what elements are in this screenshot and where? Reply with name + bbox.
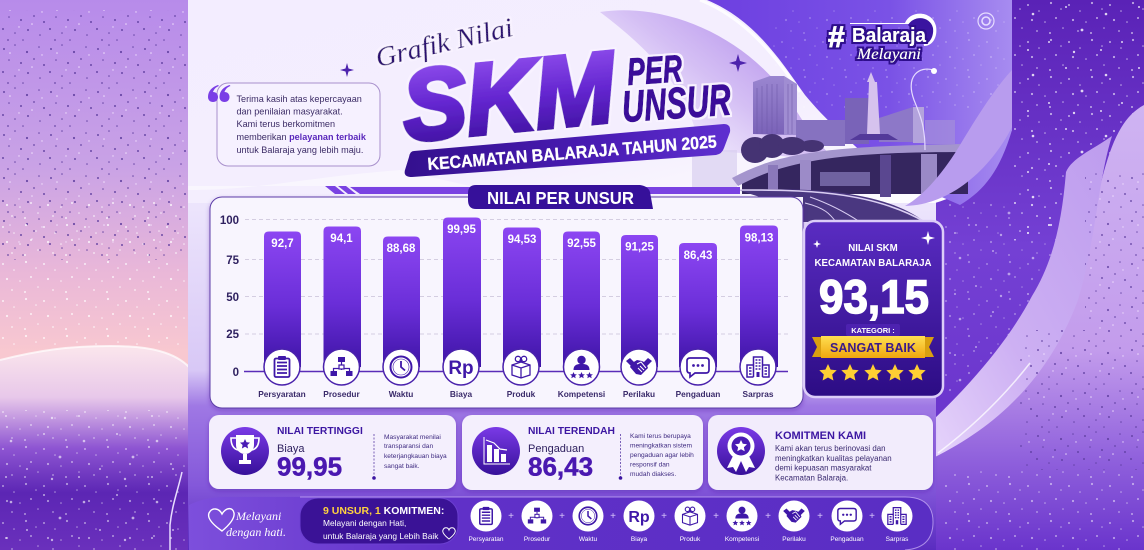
title: PER UNSUR [620,48,733,132]
highest value text: Biaya [277,443,305,455]
title: PER UNSUR: UNSUR [620,75,733,132]
quote box [208,83,380,166]
quote text: untuk Balaraja yang lebih maju. [236,145,363,155]
footer plus signs: + [559,511,565,522]
title: Grafik Nilai: Grafik Nilai [373,12,516,73]
chart category labels: Perilaku [623,389,655,399]
icon: rosette [717,427,765,475]
highest value note: Masyarakat menilai [384,434,441,441]
footer plus signs: + [713,511,719,522]
ribbon: Sangat Baik [812,336,934,358]
lowest value note: pengaduan agar lebih [630,452,694,459]
chart category labels: Sarpras [743,389,774,399]
sparkle icons [340,54,747,77]
lowest value text: 86,43 [528,452,593,482]
lowest value text [528,426,615,482]
city illustration: buildings, monument and flyover [692,68,968,222]
highest value text: NILAI TERTINGGI [277,426,363,437]
footer plus signs: + [610,511,616,522]
footer icons row: Rp [628,509,650,526]
chart grid and axis: 75 [226,255,240,267]
sparkles [813,231,935,248]
title: PER UNSUR: PER [626,48,684,94]
bar: Perilaku 91,25 [621,235,658,367]
commitment text: meningkatkan kualitas pelayanan [775,454,892,463]
chart category labels: Waktu [389,389,413,399]
quote text: Terima kasih atas kepercayaan [236,94,362,104]
category label: KATEGORI : [851,326,895,335]
footer labels: Waktu [579,536,597,543]
background: left pink-lilac side with dots [0,0,190,550]
icon: falling bar chart [472,427,520,475]
footer strip [189,497,933,550]
footer icons row [470,500,912,532]
bar: Sarpras 98,13 [740,226,778,367]
chart category labels: Pengaduan [676,389,720,399]
panel: Nilai SKM score card [804,221,943,397]
logo: #Balaraja Melayani: # [828,21,845,54]
chart category labels: Produk [507,389,536,399]
slogan: Melayani dengan hati: dengan hati. [226,525,286,539]
rating stars [819,364,926,381]
chart category labels: Kompetensi [558,389,605,399]
section header: Nilai per unsur: NILAI PER UNSUR [487,188,634,208]
footer labels [468,536,909,543]
chart icons row: Rp [448,358,474,379]
chart category labels: Persyaratan [258,389,306,399]
bar: Produk 94,53: 94,53 [508,234,536,246]
background: right purple side with swoosh and dots [933,0,1144,550]
lower centre panel background [188,190,936,550]
panel: bar chart [210,197,803,408]
bar: Kompetensi 92,55: 92,55 [567,238,596,250]
footer labels: Perilaku [782,536,806,543]
chart grid and axis: 25 [226,329,240,341]
footer labels: Produk [680,536,701,543]
bar: Biaya 99,95: 99,95 [447,224,476,236]
header panel background [188,0,1012,205]
panel: Nilai Terendah [462,415,703,490]
bar: Pengaduan 86,43 [679,243,717,367]
icon: quote mark [208,85,230,102]
lowest value note: Kami terus berupaya [630,433,691,440]
quote text: dan penilaian masyarakat. [236,106,343,116]
pill: 9 unsur 1 komitmen: 9 UNSUR, 1 KOMITMEN: [323,505,444,517]
footer plus signs: + [817,511,823,522]
chart icons row [264,349,776,385]
footer labels: Sarpras [886,536,909,543]
slogan: Melayani dengan hati: Melayani [235,509,281,523]
lowest value text: NILAI TERENDAH [528,426,615,437]
footer labels: Kompetensi [725,536,759,543]
logo: #Balaraja Melayani: Melayani [856,46,921,63]
icon: round badge top right [978,13,994,29]
chart grid and axis: 50 [226,292,239,304]
footer plus signs: + [508,511,514,522]
category label [846,324,900,336]
lowest value note: meningkatkan sistem [630,442,692,450]
footer labels: Pengaduan [830,536,864,543]
footer labels: Persyaratan [468,536,504,543]
panel: Nilai Tertinggi [209,415,456,489]
footer labels: Prosedur [524,536,551,543]
highest value note: transparansi dan [384,443,433,450]
bar: Prosedur 94,1 [324,226,361,367]
lowest value note: mudah diakses. [630,471,676,478]
logo: #Balaraja Melayani: Balaraja [852,25,927,47]
quote text: memberikan pelayanan terbaik [236,132,366,142]
icon: trophy [221,427,269,475]
pill: 9 unsur 1 komitmen [300,498,458,544]
bar: Persyaratan 92,7 [264,232,301,367]
ribbon: Sangat Baik: SANGAT BAIK [830,341,916,355]
chart grid and axis: 0 [233,367,239,379]
highest value note: keterjangkauan biaya [384,453,447,460]
bar: Pengaduan 86,43: 86,43 [684,250,712,262]
bar: Waktu 88,68: 88,68 [387,243,416,255]
chart grid and axis [220,215,788,379]
title: SKM: SKM [397,31,622,163]
footer plus signs [508,511,875,522]
chart category labels [258,389,774,399]
score heading: KECAMATAN BALARAJA [815,258,931,269]
commitment text: KOMITMEN KAMI [775,430,866,442]
commitment text: Kecamatan Balaraja. [775,474,848,482]
commitment text: Kami akan terus berinovasi dan [775,444,886,453]
score heading: NILAI SKM [848,243,898,254]
lowest value text: Pengaduan [528,443,584,455]
footer plus signs: + [661,511,667,522]
footer plus signs: + [869,511,875,522]
commitment text: demi kepuasan masyarakat [775,464,872,472]
highest value text [277,426,363,482]
bar: Prosedur 94,1: 94,1 [330,233,353,245]
lowest value note: responsif dan [630,462,670,468]
logo: #Balaraja Melayani [828,14,936,63]
banner: Kecamatan Balaraja Tahun 2025: KECAMATAN BALARAJA TAHUN 2025 [427,131,718,174]
bar: Kompetensi 92,55 [563,232,600,367]
chart category labels: Prosedur [323,389,360,399]
bar: Persyaratan 92,7: 92,7 [271,238,294,250]
commitment text [775,430,892,482]
bar: Sarpras 98,13: 98,13 [745,232,773,244]
bar: Biaya 99,95 [443,218,481,367]
header swoosh band over city [905,70,1012,206]
bar: Waktu 88,68 [383,236,420,367]
panel: Komitmen Kami [708,415,933,490]
highest value text: 99,95 [277,452,342,482]
pill: 9 unsur 1 komitmen: untuk Balaraja yang Lebih Baik [323,531,439,541]
footer plus signs: + [765,511,771,522]
bar: Perilaku 91,25: 91,25 [625,242,654,254]
highest value note: sangat baik. [384,463,420,470]
bar: Produk 94,53 [503,228,541,367]
chart grid and axis: 100 [220,215,239,227]
quote text: Kami terus berkomitmen [236,119,335,129]
pill: 9 unsur 1 komitmen: Melayani dengan Hati, [323,518,406,528]
slogan: Melayani dengan hati [209,509,286,539]
chart category labels: Biaya [450,389,472,399]
footer labels: Biaya [631,536,648,543]
section header: Nilai per unsur [325,185,740,209]
score value: 93,15 [819,270,929,323]
